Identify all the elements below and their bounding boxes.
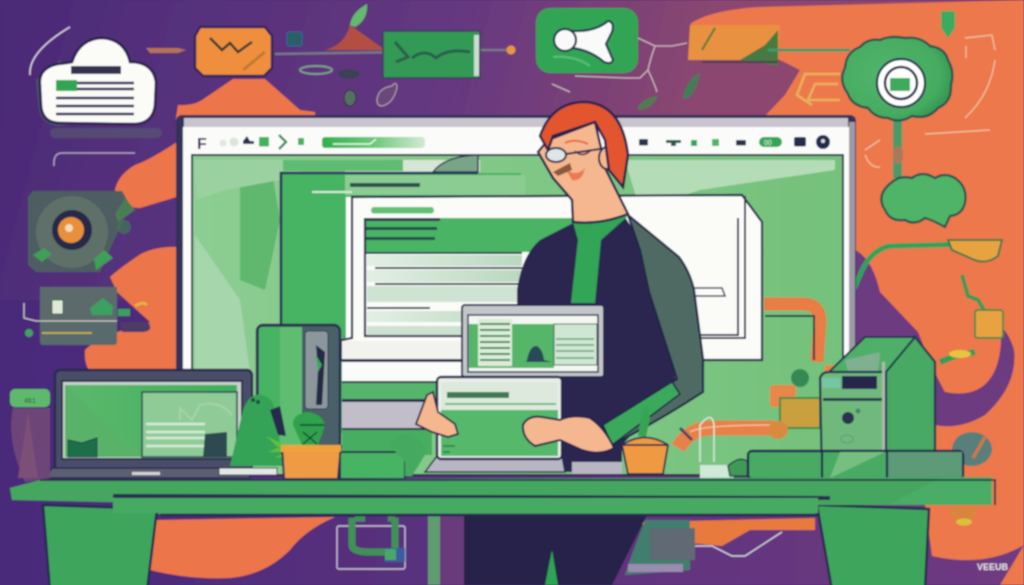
cloud document icon	[30, 27, 162, 138]
gap between legs	[545, 550, 558, 585]
left laptop screen	[62, 381, 242, 459]
mouth	[565, 168, 585, 180]
monitor bezel	[183, 127, 849, 472]
strips below window	[342, 341, 462, 455]
small shapes	[300, 66, 397, 106]
left cylinder with label	[10, 389, 50, 482]
green share icon	[536, 8, 638, 73]
tablet	[462, 305, 604, 377]
green cable and connector	[850, 240, 1002, 298]
gold bead	[950, 508, 975, 526]
green shield	[941, 11, 955, 38]
front window	[342, 195, 762, 360]
person	[461, 102, 703, 585]
device panel	[24, 287, 150, 345]
person legs	[461, 515, 647, 585]
green code panel	[383, 31, 480, 78]
leaf and peak	[325, 4, 385, 50]
neck and face	[538, 122, 628, 223]
green cuff	[603, 382, 680, 445]
glasses	[546, 148, 600, 162]
right pot with plant	[572, 405, 668, 474]
left potted plant	[266, 412, 341, 479]
orange blobs left	[85, 79, 815, 578]
monitor toolbar	[197, 135, 830, 153]
green gold chain	[940, 275, 1003, 362]
orange pot	[282, 446, 341, 479]
low green box	[340, 452, 405, 479]
gold wiring	[797, 74, 840, 105]
watermark: VEEUB	[977, 562, 1009, 572]
list rows	[365, 218, 520, 336]
monitor frame	[176, 115, 856, 475]
mustache	[553, 163, 572, 176]
left cylinder with label: 461	[24, 398, 36, 405]
monitor toolbar: F	[197, 136, 207, 153]
small square icon	[287, 32, 302, 46]
desk legs	[43, 505, 929, 585]
left hand	[416, 392, 458, 437]
orange envelope icon	[195, 27, 272, 76]
streak	[146, 48, 186, 53]
monitor toolbar: 00	[764, 140, 772, 147]
orange box icon	[688, 25, 780, 66]
server tower	[257, 325, 340, 453]
left laptop dark tiles	[68, 438, 97, 457]
monitor screen	[192, 155, 843, 475]
right sleeve	[603, 215, 703, 445]
right badge	[952, 432, 992, 466]
pill header	[371, 207, 434, 214]
left laptop	[45, 370, 277, 478]
connector line	[275, 50, 512, 54]
hook line	[54, 153, 135, 166]
white cable	[695, 532, 782, 556]
printer	[820, 337, 935, 478]
machinery below desk	[337, 515, 464, 585]
lower green cloud	[881, 174, 966, 227]
connector to tree	[768, 48, 850, 52]
green header block	[365, 218, 600, 252]
orange node	[506, 46, 516, 54]
machinery right of legs	[625, 520, 695, 575]
held laptop	[425, 377, 565, 472]
ear	[599, 147, 615, 169]
monitor top bevel	[184, 118, 848, 127]
gear panel	[28, 191, 135, 272]
printer base	[748, 450, 963, 479]
screen mottling	[195, 160, 835, 372]
left laptop inner panel	[142, 392, 237, 457]
leaves	[637, 73, 700, 110]
back window	[281, 155, 525, 440]
right edges	[625, 196, 745, 338]
plant behind laptop	[390, 434, 425, 476]
pale traces right	[865, 35, 995, 167]
desk	[10, 477, 995, 515]
hair	[540, 102, 628, 187]
orange pipework	[678, 304, 840, 478]
right hand	[523, 416, 614, 453]
torso	[517, 217, 677, 472]
branching cable	[552, 38, 687, 92]
shirt	[571, 216, 628, 303]
green bullet figure	[230, 395, 286, 466]
green tree with logo	[842, 37, 952, 178]
left laptop base	[45, 468, 250, 478]
brow	[565, 141, 588, 144]
monitor	[176, 115, 856, 475]
